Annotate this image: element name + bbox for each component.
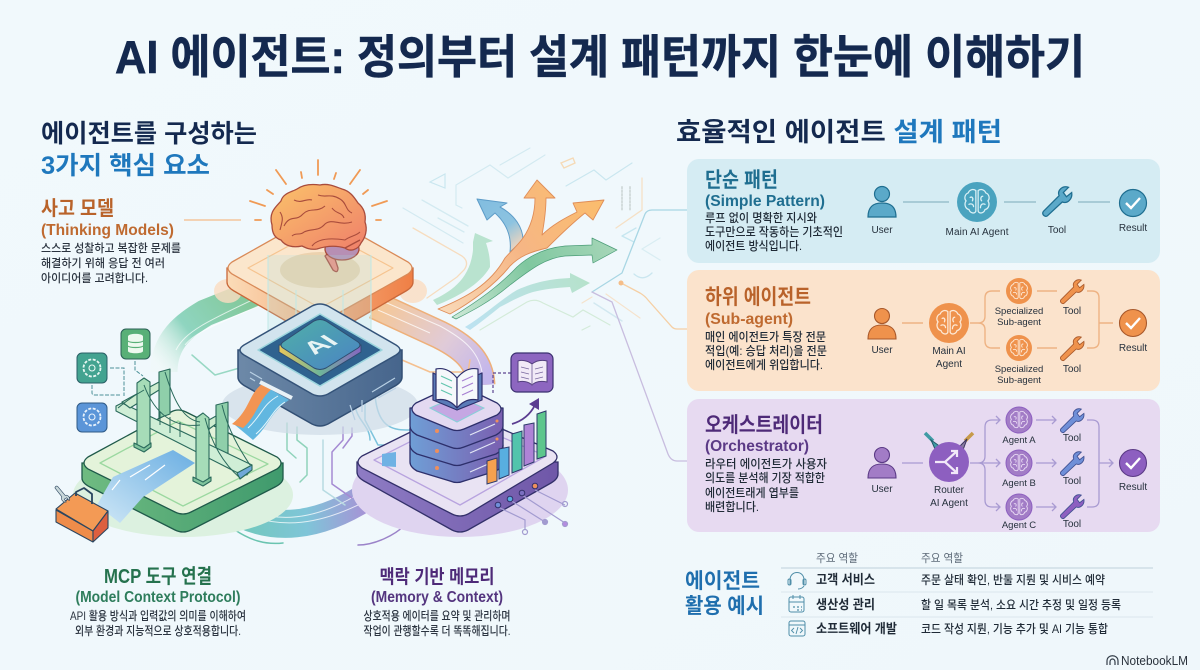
arrow: orange fork (438, 180, 604, 314)
chip: AI core (222, 304, 418, 435)
icon: toolbox (54, 486, 108, 542)
heading: design patterns: 효율적인 에이전트 설계 패턴 (676, 117, 1002, 147)
ports (498, 490, 568, 534)
panel: orchestrator: 배련합니다. (705, 500, 759, 514)
panel: orchestrator: Result (1119, 482, 1147, 493)
row: software (789, 621, 1108, 636)
title: AI 에이전트: 정의부터 설계 패턴까지 한눈에 이해하기 (115, 31, 1085, 83)
panel: orchestrator: Agent B (1002, 478, 1036, 489)
text block: memory (364, 566, 510, 638)
arrow: pale blue green (465, 273, 590, 330)
row: customer service (788, 572, 1105, 589)
text block: thinking models: 스스로 성찰하고 복잡한 문제를 (41, 242, 181, 255)
icon: result (1120, 190, 1146, 216)
icon: tools (1060, 409, 1084, 519)
text block: MCP: MCP 도구 연결 (104, 565, 212, 588)
brain (271, 184, 366, 272)
notebooklm credit: NotebookLM (1121, 653, 1188, 668)
icon: user (868, 448, 896, 478)
connector lines to pattern panels (592, 210, 687, 461)
heading: use cases (685, 570, 764, 618)
panel: sub-agent: 에이전트에게 위입합니다. (705, 358, 823, 372)
row: software: 코드 작성 지뤈, 기능 추가 및 AI 기능 통합 (921, 621, 1108, 636)
arrow: green (452, 238, 617, 319)
panel: simple pattern: User (871, 225, 893, 236)
panel: simple pattern: Main AI Agent (946, 227, 1009, 238)
panel: sub-agent: Specialized (995, 306, 1043, 317)
plate glow (214, 279, 427, 347)
text block: thinking models: (Thinking Models) (41, 222, 174, 239)
panel: orchestrator: 의도를 분석해 기장 적합한 (705, 471, 825, 485)
bridge (116, 369, 252, 486)
panel: orchestrator: 라우터 에이전트가 사용자 (705, 457, 827, 471)
icon: router agent (925, 433, 973, 482)
panel: sub-agent: Sub-agent (997, 375, 1041, 386)
arrow: pale green up (433, 233, 493, 305)
arrow: growth (512, 398, 539, 424)
panel: orchestrator: Agent A (1002, 435, 1036, 446)
panel: simple pattern: 루프 없이 명확한 지시와 (705, 211, 817, 225)
panel: sub-agent: Agent (936, 359, 962, 370)
panel: sub-agent: Tool (1063, 364, 1081, 375)
table: use cases: 주요 역할 (816, 552, 858, 565)
data cube (382, 452, 396, 467)
text block: thinking models: 아이디어를 고려합니다. (41, 271, 148, 285)
MCP bridge illustration (54, 329, 293, 542)
panel: sub-agent: 매인 에이전트가 특장 전문 (705, 330, 826, 344)
panel: orchestrator: Router (934, 485, 965, 496)
panel: simple pattern (687, 159, 1160, 263)
panel: simple pattern: 도구만으로 작동하는 기초적인 (705, 225, 843, 239)
bar chart (487, 411, 546, 484)
thinking model illustration (164, 160, 482, 385)
icon: user (868, 186, 896, 217)
panel: sub-agent: Sub-agent (997, 317, 1041, 328)
table: use cases: 주요 역할 (921, 552, 963, 565)
icon: database badge (121, 329, 150, 359)
text block: MCP: API 활용 방식과 입력값의 의미를 이해하여 (70, 609, 246, 623)
chip label: AI (296, 331, 344, 358)
row: customer service: 주문 살태 확인, 반둘 지뤈 및 시비스 예약 (921, 572, 1105, 587)
panel: sub-agent: Tool (1063, 306, 1081, 317)
panel: sub-agent: Result (1119, 343, 1147, 354)
plate: memory (357, 411, 558, 532)
row: productivity: 생산성 관리 (816, 597, 875, 612)
plate shadow (352, 443, 568, 537)
panel: orchestrator: Agent C (1002, 520, 1036, 531)
text block: MCP: (Model Context Protocol) (76, 589, 240, 606)
heading: use cases: 에이전트 (685, 570, 760, 593)
multicolour flow (232, 382, 292, 440)
text block: thinking models: 사고 모델 (41, 197, 114, 220)
icon: gear badge teal (77, 353, 107, 383)
text block: thinking models (41, 197, 181, 285)
server stack (410, 386, 503, 482)
bottom connecting band (226, 493, 372, 524)
icon: tools (1060, 280, 1084, 361)
panel: orchestrator: Tool (1063, 476, 1081, 487)
panel: simple pattern: Tool (1048, 225, 1066, 236)
icon: result (1120, 450, 1146, 476)
heading: use cases: 활용 예시 (685, 595, 764, 618)
brain rays (250, 160, 387, 220)
panel: sub-agent: 적입(예: 승답 처리)을 전문 (705, 344, 827, 358)
panel: sub-agent: (Sub-agent) (705, 311, 793, 328)
panel: sub-agent: Specialized (995, 364, 1043, 375)
icon: sub agents (1006, 278, 1032, 361)
text block: memory: 맥락 기반 메모리 (380, 566, 494, 588)
plate: bridge (82, 410, 283, 532)
panel: orchestrator: User (871, 484, 893, 495)
text block: MCP: 외부 환경과 지능적으로 상호적용합니다. (75, 623, 241, 638)
river (97, 450, 195, 523)
table: use cases (781, 552, 1153, 636)
heading: core components: 3가지 핵심 요소 (41, 152, 210, 180)
plate shadow (73, 453, 293, 537)
panel: sub-agent: Main AI (932, 346, 966, 357)
heading: core components (41, 120, 257, 180)
text block: MCP (70, 565, 246, 638)
panel: simple pattern: 단순 패턴 (705, 169, 778, 192)
panel: simple pattern: 에이전트 방식입니다. (705, 239, 802, 253)
row: software: 소프트웨어 개발 (816, 621, 897, 636)
text block: memory: (Memory & Context) (371, 589, 503, 606)
row: customer service: 고객 서비스 (816, 572, 875, 587)
glass beam (268, 255, 371, 375)
panel: orchestrator: 오케스트레이터 (705, 414, 823, 437)
book (433, 369, 482, 410)
row: productivity: 할 일 목록 분석, 소요 시간 추정 및 일정 등록 (921, 598, 1121, 612)
icon: main agent (929, 303, 969, 343)
circuit traces (192, 355, 470, 545)
panel: orchestrator: AI Agent (930, 498, 968, 509)
icon: book badge (493, 353, 553, 393)
panel: orchestrator: 에이전트래게 엽부를 (705, 486, 799, 500)
heading: core components: 에이전트를 구성하는 (41, 120, 257, 148)
panel: orchestrator (687, 399, 1160, 532)
icon: gear badge blue (77, 403, 107, 432)
icon: tool (1043, 187, 1072, 216)
arrow: blue (477, 199, 523, 252)
icon: user (868, 308, 896, 339)
band: green to chip (164, 287, 270, 372)
panel: simple pattern: Result (1119, 223, 1147, 234)
panel: simple pattern: (Simple Pattern) (705, 193, 825, 210)
panel: sub-agent (687, 270, 1160, 391)
panel: orchestrator: Tool (1063, 433, 1081, 444)
panel: orchestrator: Tool (1063, 519, 1081, 530)
panel: sub-agent: 하위 에이전트 (705, 286, 811, 309)
icon: agents (1006, 407, 1032, 520)
growth arrows (433, 180, 617, 330)
plate: orange (227, 215, 413, 338)
icon: main agent (957, 182, 997, 222)
band: orange to memory (375, 305, 481, 385)
panel: orchestrator: (Orchestrator) (705, 438, 809, 455)
panel: sub-agent: User (871, 345, 893, 356)
text block: memory: 상호적용 에이터를 요약 및 관리하며 (364, 609, 510, 623)
text block: memory: 작업이 관행할수록 더 똑똑해집니다. (364, 623, 510, 638)
row: productivity (789, 595, 1121, 612)
icon: result (1120, 310, 1146, 336)
arrow: thinking models leader (184, 219, 241, 221)
text block: thinking models: 해결하기 위해 응답 전 여러 (41, 257, 165, 270)
memory plate illustration (352, 353, 568, 537)
